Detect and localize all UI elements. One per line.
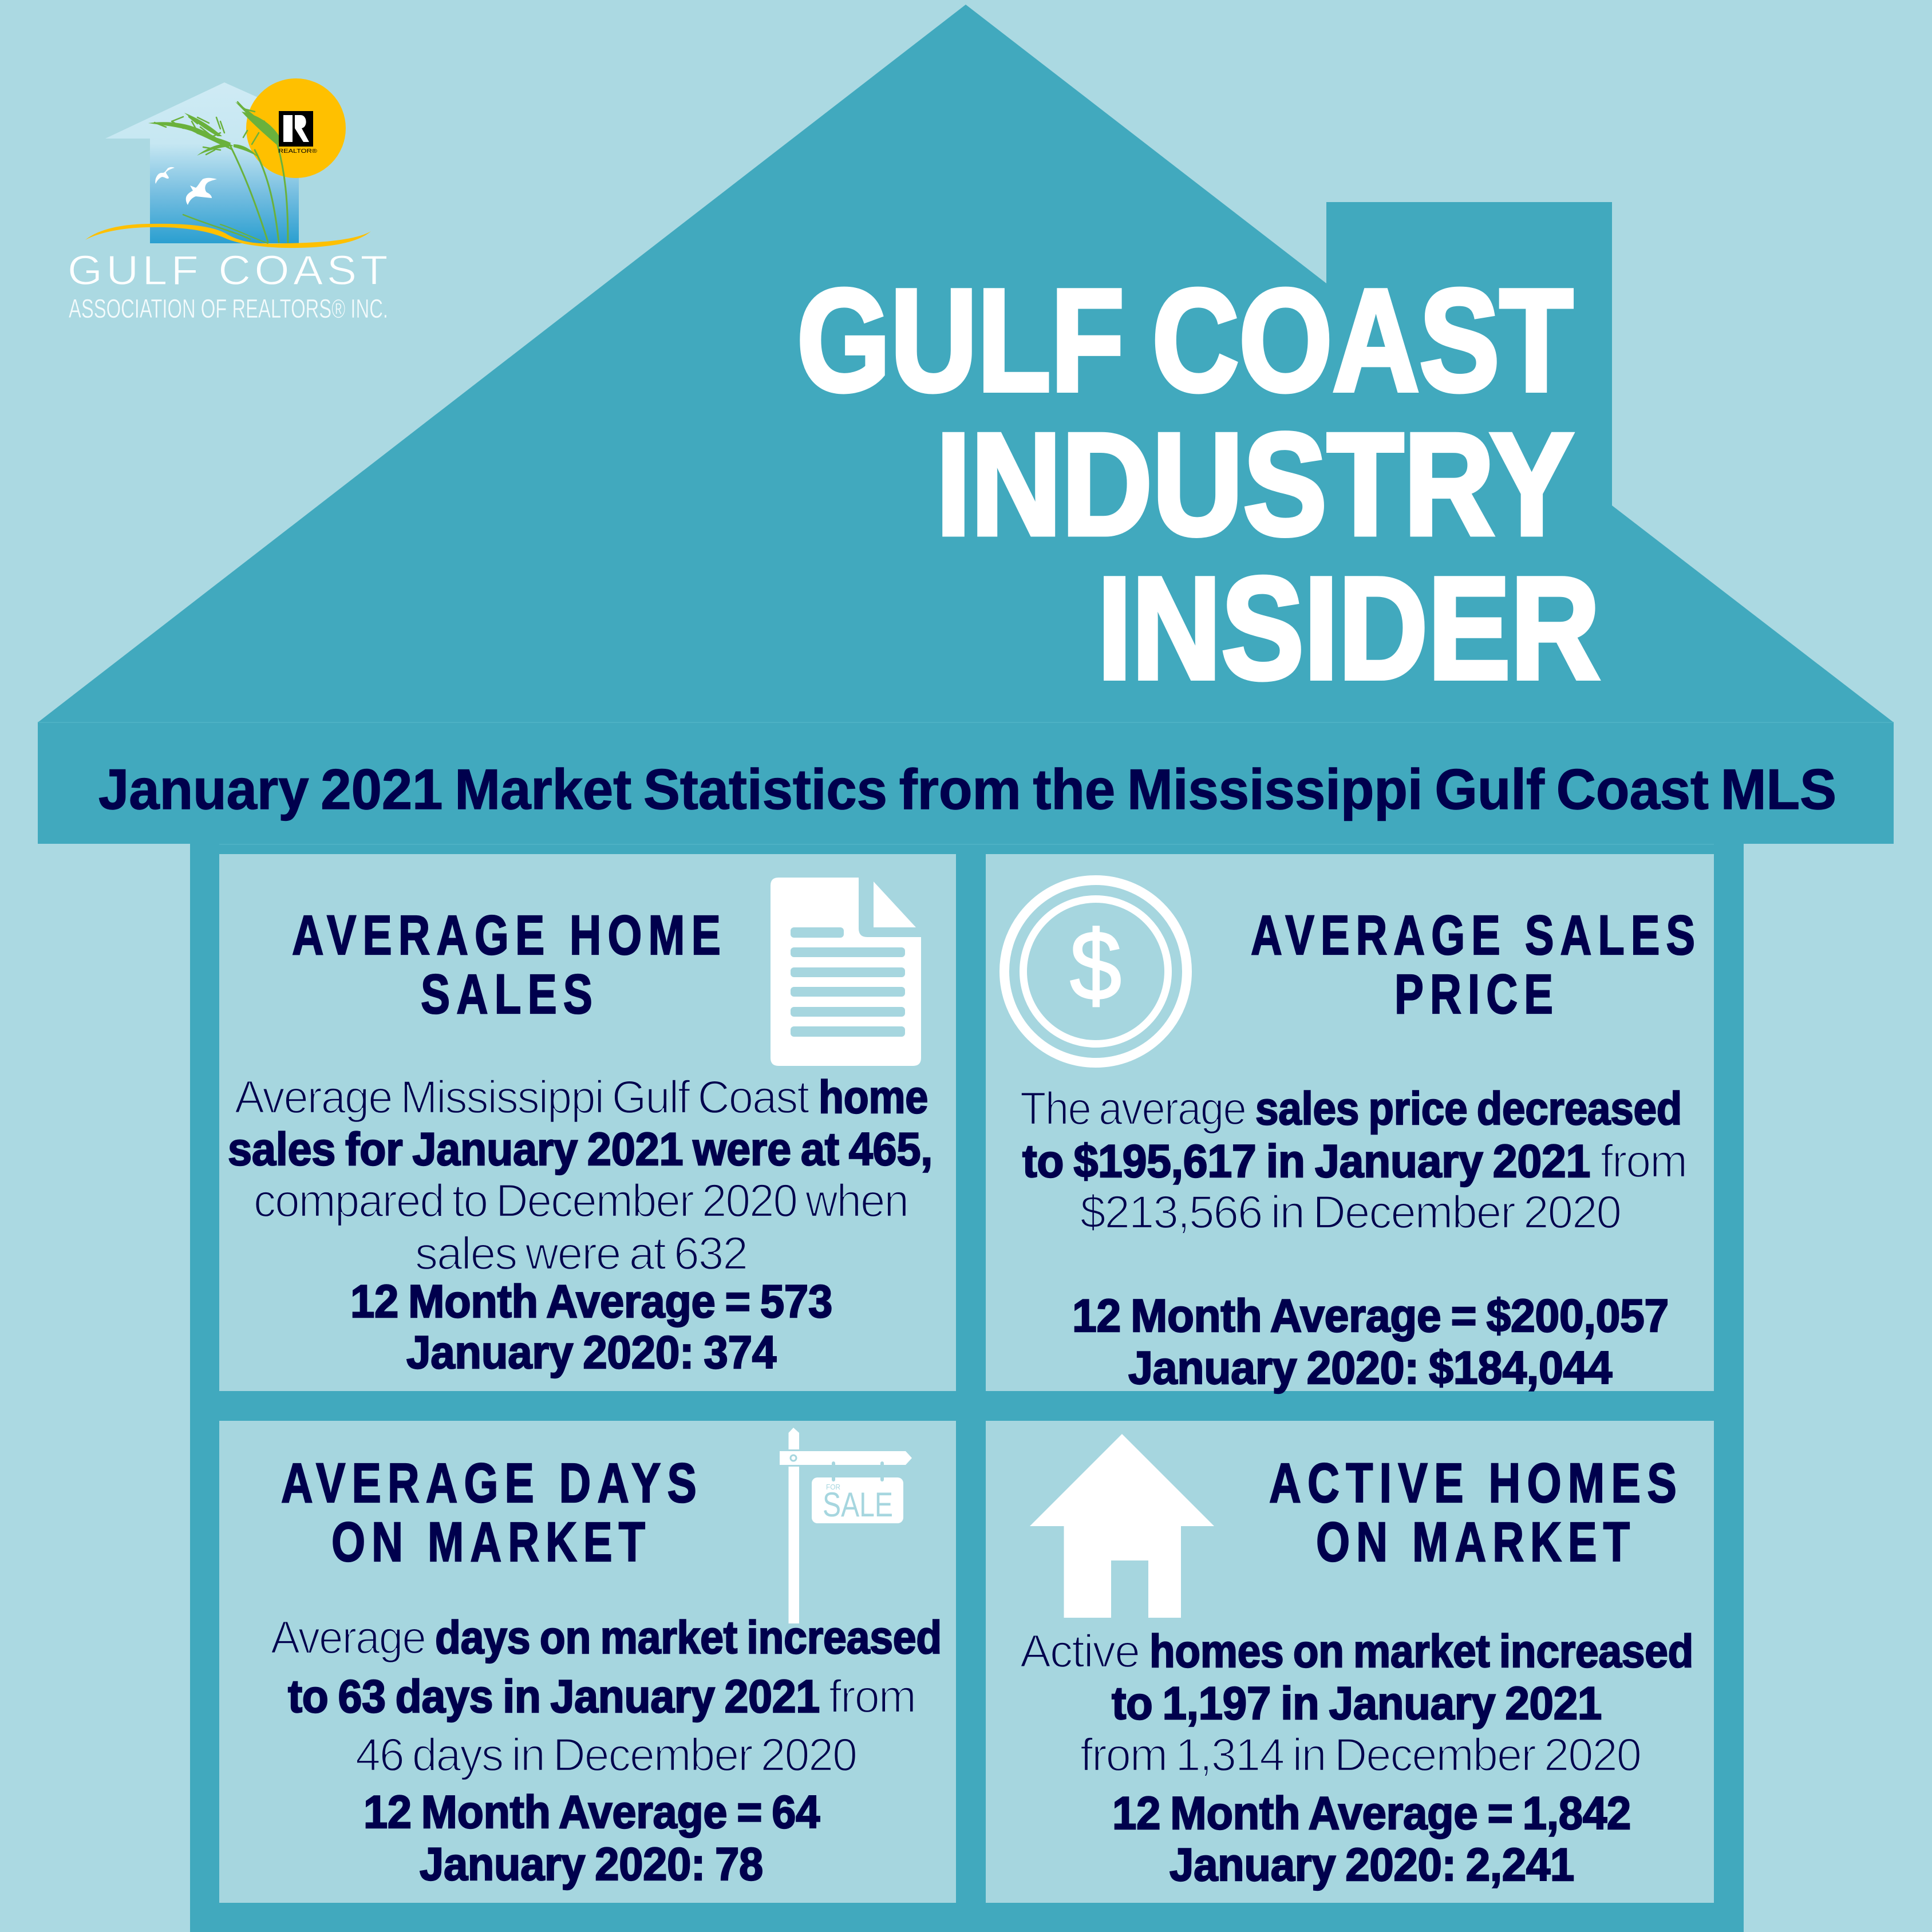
- body text: 12 Month Average = 1,842: [1112, 1788, 1631, 1839]
- logo subline: ASSOCIATION OF REALTORS® INC.: [69, 294, 388, 323]
- logo birds: [155, 167, 217, 205]
- body text: sales for January 2021 were at 465,: [228, 1124, 933, 1175]
- realtor R mark: REALTOR®: [278, 148, 318, 155]
- heading: average days on market: [281, 1452, 703, 1573]
- body text: January 2020: 374: [406, 1327, 776, 1378]
- icon: dollar coin: [1004, 880, 1187, 1062]
- logo: Gulf Coast Association of Realtors: [68, 78, 392, 323]
- body text: compared to December 2020 when: [254, 1175, 908, 1227]
- panel: average home sales: [219, 854, 956, 1391]
- body text: days on market increased: [435, 1612, 942, 1664]
- body text: from: [829, 1671, 915, 1722]
- body text: from: [1601, 1136, 1686, 1187]
- body text: 12 Month Average = 573: [350, 1276, 832, 1327]
- body text: [1020, 1626, 1693, 1891]
- heading: average days on market: ON MARKET: [331, 1511, 651, 1573]
- heading: average home sales: AVERAGE HOME: [292, 904, 727, 966]
- subtitle band text: January 2021 Market Statistics from the Mississippi Gulf Coast MLS: [98, 757, 1836, 821]
- body text: [228, 1072, 933, 1378]
- heading: average sales price: AVERAGE SALES: [1251, 904, 1701, 966]
- logo wordmark: GULF COAST: [68, 248, 392, 294]
- title: INDUSTRY: [936, 403, 1574, 566]
- icon: house: [1030, 1434, 1214, 1618]
- heading: average sales price: PRICE: [1394, 963, 1559, 1025]
- body text: January 2020: 78: [420, 1839, 763, 1890]
- logo house: [105, 82, 299, 243]
- body text: to 63 days in January 2021: [288, 1671, 820, 1722]
- body text: January 2020: 2,241: [1170, 1839, 1574, 1891]
- body text: 46 days in December 2020: [355, 1729, 856, 1781]
- title: GULF COAST: [797, 259, 1573, 421]
- icon: for sale sign: FOR: [826, 1483, 840, 1491]
- icon: dollar coin: $: [1070, 911, 1121, 1021]
- body text: from 1,314 in December 2020: [1080, 1729, 1641, 1781]
- body text: January 2020: $184,044: [1128, 1342, 1612, 1394]
- icon: for sale sign: [780, 1428, 912, 1623]
- body text: [271, 1612, 942, 1890]
- heading: active homes on market: ACTIVE HOMES: [1269, 1452, 1683, 1514]
- body text: Active: [1020, 1626, 1139, 1677]
- logo sun: [246, 78, 346, 178]
- icon: for sale sign: SALE: [823, 1485, 893, 1524]
- heading: active homes on market: ON MARKET: [1316, 1511, 1636, 1573]
- heading: average home sales: SALES: [421, 963, 599, 1025]
- body text: 12 Month Average = 64: [364, 1787, 820, 1838]
- body text: $213,566 in December 2020: [1080, 1187, 1621, 1238]
- body text: to $195,617 in January 2021: [1022, 1136, 1590, 1187]
- body text: homes on market increased: [1149, 1626, 1693, 1677]
- title: [797, 259, 1600, 709]
- body text: 12 Month Average = $200,057: [1072, 1290, 1669, 1342]
- body text: sales were at 632: [415, 1228, 747, 1279]
- heading: average days on market: AVERAGE DAYS: [281, 1452, 703, 1514]
- icon: document: [771, 878, 921, 1066]
- logo sand swoosh: [85, 224, 371, 248]
- body text: The average: [1020, 1083, 1246, 1135]
- logo grass: [148, 102, 288, 243]
- body text: Average Mississippi Gulf Coast: [235, 1072, 809, 1123]
- title: INSIDER: [1097, 547, 1600, 709]
- body text: home: [819, 1072, 928, 1123]
- heading: average home sales: [292, 904, 727, 1025]
- panel: average sales price: [986, 854, 1714, 1394]
- panel: active homes on market: [986, 1421, 1714, 1903]
- heading: active homes on market: [1269, 1452, 1683, 1573]
- panel: average days on market: [219, 1421, 956, 1903]
- body text: Average: [271, 1612, 425, 1664]
- body text: sales price decreased: [1255, 1083, 1682, 1135]
- heading: average sales price: [1251, 904, 1701, 1025]
- body text: [1020, 1083, 1686, 1394]
- realtor R mark: [278, 111, 318, 155]
- body text: to 1,197 in January 2021: [1112, 1678, 1602, 1729]
